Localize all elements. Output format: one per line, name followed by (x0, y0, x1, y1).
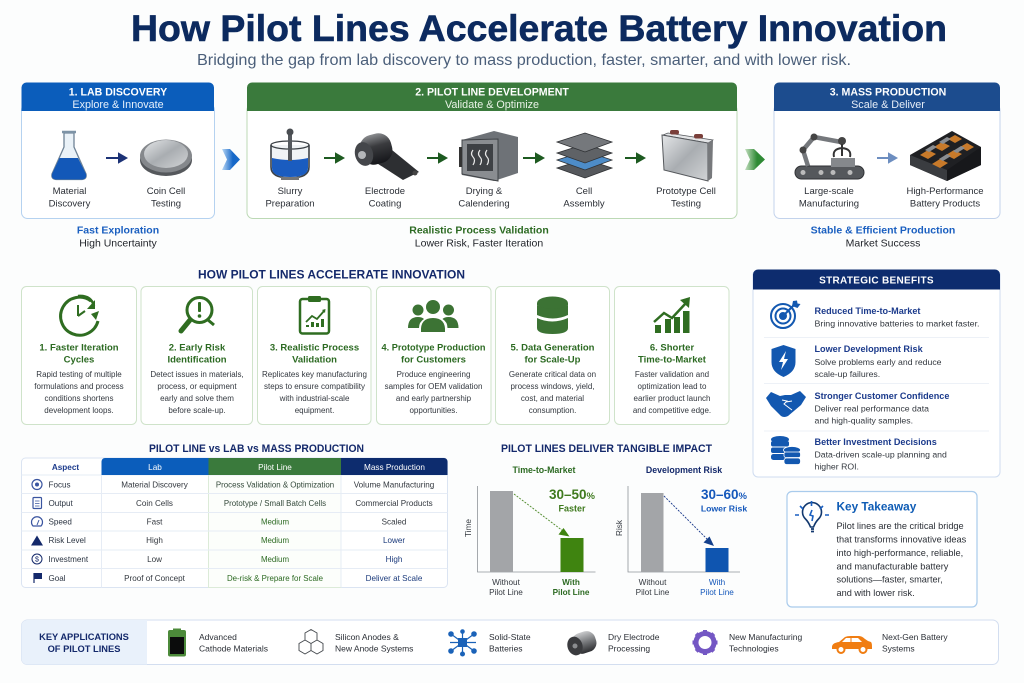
text: early and solve them (160, 394, 234, 403)
chart: development risk: Pilot Line (636, 588, 670, 597)
panel: lab discovery (22, 82, 214, 218)
text: 2. Early Risk (169, 342, 226, 354)
subtitle: Bridging the gap from lab discovery to mass production, faster, smarter, and with lower risk. (197, 52, 851, 69)
benefits header: STRATEGIC BENEFITS (819, 276, 934, 286)
comparison table (22, 458, 448, 588)
benefit: investment (771, 436, 947, 472)
row: output: Commercial Products (355, 499, 433, 508)
mass header: 3. MASS PRODUCTION (830, 86, 946, 98)
app: silicon anodes: Silicon Anodes & (335, 632, 399, 642)
panel: mass production (774, 82, 1000, 218)
lab summary (77, 224, 159, 250)
text: steps to ensure compatibility (264, 382, 365, 391)
icon: light bulb (795, 501, 829, 532)
row: risk level: Risk Level (48, 536, 86, 545)
card 3 (258, 286, 371, 424)
row: goal: Goal (48, 574, 66, 583)
text: Generate critical data on (509, 370, 596, 379)
chart: time to market: Faster (558, 504, 586, 514)
row: focus (32, 480, 434, 490)
text: conditions shortens (45, 394, 113, 403)
table header: Mass Production (364, 463, 425, 472)
text: opportunities. (409, 406, 458, 415)
label: electrode coating: Coating (369, 198, 401, 210)
chart: time to market: With (562, 578, 580, 587)
text: with industrial-scale (279, 394, 350, 403)
key takeaway text: and manufacturable battery (836, 562, 949, 572)
panel: key applications (22, 620, 998, 664)
app: silicon anodes: New Anode Systems (335, 644, 413, 654)
text: 5. Data Generation (511, 342, 595, 354)
key takeaway text: solutions—faster, smarter, (836, 574, 943, 584)
text: before scale-up. (168, 406, 226, 415)
row: output: Prototype / Small Batch Cells (224, 499, 326, 508)
text: development loops. (44, 406, 114, 415)
benefit: time to market (771, 300, 980, 328)
icon: robot arm on conveyor (795, 134, 864, 179)
arrow (106, 154, 126, 162)
text: earlier product launch (634, 394, 710, 403)
app: silicon anodes (299, 630, 413, 654)
text: for Customers (401, 354, 466, 366)
text: cost, and material (521, 394, 584, 403)
row: speed (32, 517, 406, 526)
text: and early partnership (396, 394, 472, 403)
icon: coin cell (140, 140, 192, 176)
panel: strategic benefits (753, 270, 1000, 477)
benefit: confidence: and high-quality samples. (814, 416, 913, 426)
icon: cell assembly stack (557, 133, 612, 178)
label: drying and calendering: Calendering (458, 198, 510, 210)
benefit: time to market: Bring innovative batteries to market faster. (814, 318, 980, 328)
text: Identification (167, 354, 227, 366)
text: 3. Realistic Process (270, 342, 359, 354)
text (150, 342, 244, 415)
text: for Scale-Up (525, 354, 581, 366)
text (34, 342, 124, 415)
benefit: lower risk (772, 344, 942, 379)
mass header: Scale & Deliver (851, 99, 925, 111)
text: Detect issues in materials, (150, 370, 244, 379)
row: focus: Process Validation & Optimization (216, 480, 334, 490)
key takeaway text: Pilot lines are the critical bridge (836, 521, 964, 531)
chart: development risk (615, 465, 748, 597)
chart: time to market: Time (464, 519, 473, 537)
text (509, 342, 596, 415)
app: cathode: Advanced (199, 632, 237, 642)
applications heading: KEY APPLICATIONS (39, 632, 129, 642)
benefit: investment: Better Investment Decisions (814, 437, 937, 447)
chart: time to market: 30–50% (549, 487, 596, 502)
table header: Lab (148, 463, 162, 472)
text: Faster validation and (635, 370, 709, 379)
icon: battery pack (910, 131, 981, 181)
text: 4. Prototype Production (382, 342, 486, 354)
row: risk level: Lower (383, 536, 405, 545)
icon: flask (52, 132, 86, 180)
arrow (625, 154, 644, 162)
text: optimization lead to (638, 382, 707, 391)
arrow (523, 154, 543, 162)
card 5 (496, 286, 610, 424)
text: Replicates key manufacturing (262, 370, 367, 379)
arrow (324, 154, 343, 162)
chart: development risk: Pilot Line (700, 588, 734, 597)
chart: development risk: Risk (615, 519, 624, 536)
lab header (22, 82, 214, 111)
icon: slurry mixer (271, 128, 309, 180)
benefit: confidence: Stronger Customer Confidence (814, 391, 949, 401)
text (382, 342, 486, 415)
label: coin cell testing: Coin Cell (147, 186, 185, 197)
row: goal (34, 573, 423, 583)
card 4 (376, 286, 491, 424)
row: risk level: Medium (261, 536, 289, 545)
lab summary: Fast Exploration (77, 224, 159, 236)
chart: development risk: Lower Risk (701, 504, 747, 514)
pilot summary: Realistic Process Validation (409, 224, 549, 236)
pilot summary: Lower Risk, Faster Iteration (415, 238, 543, 250)
table header: Aspect (52, 463, 79, 472)
icon: clock cycle (61, 296, 99, 335)
label: slurry preparation: Preparation (265, 198, 315, 210)
text: formulations and process (34, 382, 124, 391)
icon: prototype cell (662, 130, 713, 181)
key takeaway text: that transforms innovative ideas (836, 534, 967, 544)
arrow: pilot to mass (745, 149, 765, 170)
row: output (33, 498, 433, 508)
pilot header: 2. PILOT LINE DEVELOPMENT (415, 86, 569, 98)
row: investment: Low (147, 555, 162, 564)
label: battery products: Battery Products (910, 198, 980, 210)
key takeaway heading: Key Takeaway (836, 500, 917, 514)
table header: Pilot Line (258, 463, 292, 472)
app: dry electrode: Processing (608, 644, 650, 654)
app: solid-state (448, 629, 531, 656)
text: equipment. (295, 406, 334, 415)
row: focus: Focus (48, 480, 71, 490)
benefit: investment: higher ROI. (814, 462, 859, 472)
row: investment: $ (35, 556, 39, 564)
text (262, 342, 367, 415)
row: goal: Proof of Concept (124, 574, 186, 583)
chart: development risk: Without (639, 578, 667, 587)
text: Validation (292, 354, 337, 366)
icon: clipboard chart (300, 296, 329, 334)
row: output: Coin Cells (136, 499, 173, 508)
arrow (877, 154, 896, 162)
icon: database (537, 296, 568, 334)
chart: time to market: Time-to-Market (513, 465, 576, 475)
app: solid-state: Batteries (489, 644, 523, 654)
chart: time to market: Pilot Line (553, 588, 590, 597)
app: dry electrode: Dry Electrode (608, 632, 660, 642)
label: material discovery: Discovery (49, 198, 91, 210)
card 6 (614, 286, 729, 424)
label: prototype cell testing: Testing (671, 198, 701, 210)
text: Cycles (64, 354, 94, 366)
row: goal: De-risk & Prepare for Scale (227, 574, 324, 583)
panel: key takeaway (787, 492, 977, 607)
key takeaway text: into high-performance, reliable, (836, 548, 963, 558)
label: battery products: High-Performance (906, 186, 984, 197)
icon: drying oven (459, 131, 518, 181)
app: manufacturing gear: New Manufacturing (729, 632, 803, 642)
text: process, or equipment (157, 382, 237, 391)
chart: time to market (464, 465, 596, 597)
heading: how pilot lines accelerate: HOW PILOT LINES ACCELERATE INNOVATION (198, 268, 465, 282)
row: speed: Scaled (382, 518, 406, 526)
row: risk level (31, 536, 405, 546)
benefit: lower risk: Solve problems early and reduce (814, 357, 942, 367)
app: next-gen car: Systems (882, 644, 915, 654)
label: cell assembly: Cell (576, 186, 592, 197)
benefit: investment: Data-driven scale-up planning and (814, 450, 947, 460)
app: next-gen car (832, 632, 948, 654)
icon: magnifier risk (181, 298, 214, 331)
benefit: confidence (766, 391, 949, 426)
icon: people (408, 300, 458, 332)
benefit: confidence: Deliver real performance data (814, 404, 929, 414)
app: manufacturing gear (692, 630, 803, 655)
label: drying and calendering: Drying & (466, 186, 503, 197)
pilot summary (409, 224, 549, 250)
row: risk level: High (146, 536, 163, 545)
label: cell assembly: Assembly (563, 198, 605, 210)
label: coin cell testing: Testing (151, 198, 181, 210)
lab header: Explore & Innovate (72, 99, 164, 111)
text: 1. Faster Iteration (39, 342, 119, 354)
label: slurry preparation: Slurry (278, 186, 303, 197)
chart: development risk: With (709, 578, 726, 587)
benefit: lower risk: scale-up failures. (814, 369, 880, 379)
mass header (774, 82, 1000, 111)
row: focus: Volume Manufacturing (354, 480, 434, 490)
chart: time to market: Pilot Line (489, 588, 523, 597)
arrow: lab to pilot (222, 149, 240, 170)
chart: development risk: 30–60% (701, 487, 748, 502)
chart: development risk: Development Risk (646, 465, 722, 475)
row: investment (32, 554, 402, 564)
app: cathode: Cathode Materials (199, 644, 268, 654)
card 2 (141, 286, 252, 424)
row: investment: Medium (261, 555, 289, 564)
row: speed: Speed (48, 518, 72, 526)
text: Produce engineering (397, 370, 470, 379)
label: electrode coating: Electrode (365, 186, 405, 197)
mass summary (811, 224, 955, 250)
heading: tangible impact: PILOT LINES DELIVER TANGIBLE IMPACT (501, 443, 712, 455)
benefit: time to market: Reduced Time-to-Market (814, 306, 920, 316)
heading: comparison table: PILOT LINE vs LAB vs MASS PRODUCTION (149, 443, 364, 455)
text: and competitive edge. (633, 406, 711, 415)
key takeaway text: and with lower risk. (836, 588, 915, 598)
pilot header: Validate & Optimize (445, 99, 539, 111)
text: Time-to-Market (638, 354, 707, 366)
row: output: Output (48, 499, 74, 508)
lab header: 1. LAB DISCOVERY (69, 86, 167, 98)
benefit: lower risk: Lower Development Risk (814, 344, 924, 354)
app: manufacturing gear: Technologies (729, 644, 779, 654)
app: next-gen car: Next-Gen Battery (882, 632, 948, 642)
table header (52, 458, 448, 475)
app: dry electrode (565, 629, 660, 657)
label: material discovery: Material (53, 186, 86, 197)
text: Rapid testing of multiple (36, 370, 122, 379)
label: prototype cell testing: Prototype Cell (656, 186, 716, 197)
mass summary: Stable & Efficient Production (811, 224, 955, 236)
text: consumption. (529, 406, 576, 415)
applications heading: OF PILOT LINES (48, 644, 120, 654)
icon: electrode coating (352, 130, 419, 180)
panel: pilot line development (247, 82, 737, 218)
chart: time to market: Without (492, 578, 521, 587)
label: large-scale manufacturing: Manufacturing (799, 198, 859, 210)
row: goal: Deliver at Scale (366, 574, 423, 583)
row: investment: High (386, 555, 402, 564)
card 1 (22, 286, 136, 424)
row: focus: Material Discovery (121, 480, 189, 490)
row: speed: Fast (147, 518, 163, 526)
text: 6. Shorter (650, 342, 694, 354)
text: samples for OEM validation (385, 382, 482, 391)
text: process windows, yield, (510, 382, 595, 391)
pilot header (247, 82, 737, 111)
mass summary: Market Success (846, 238, 920, 250)
benefits header (753, 270, 1000, 290)
arrow (427, 154, 446, 162)
lab summary: High Uncertainty (79, 238, 158, 250)
label: large-scale manufacturing: Large-scale (804, 186, 854, 197)
icon: growth chart (654, 297, 690, 333)
app: cathode (168, 628, 268, 656)
title: How Pilot Lines Accelerate Battery Innovation (131, 8, 947, 49)
row: speed: Medium (261, 518, 289, 526)
row: investment: Investment (48, 555, 89, 564)
text (633, 342, 711, 415)
app: solid-state: Solid-State (489, 632, 531, 642)
